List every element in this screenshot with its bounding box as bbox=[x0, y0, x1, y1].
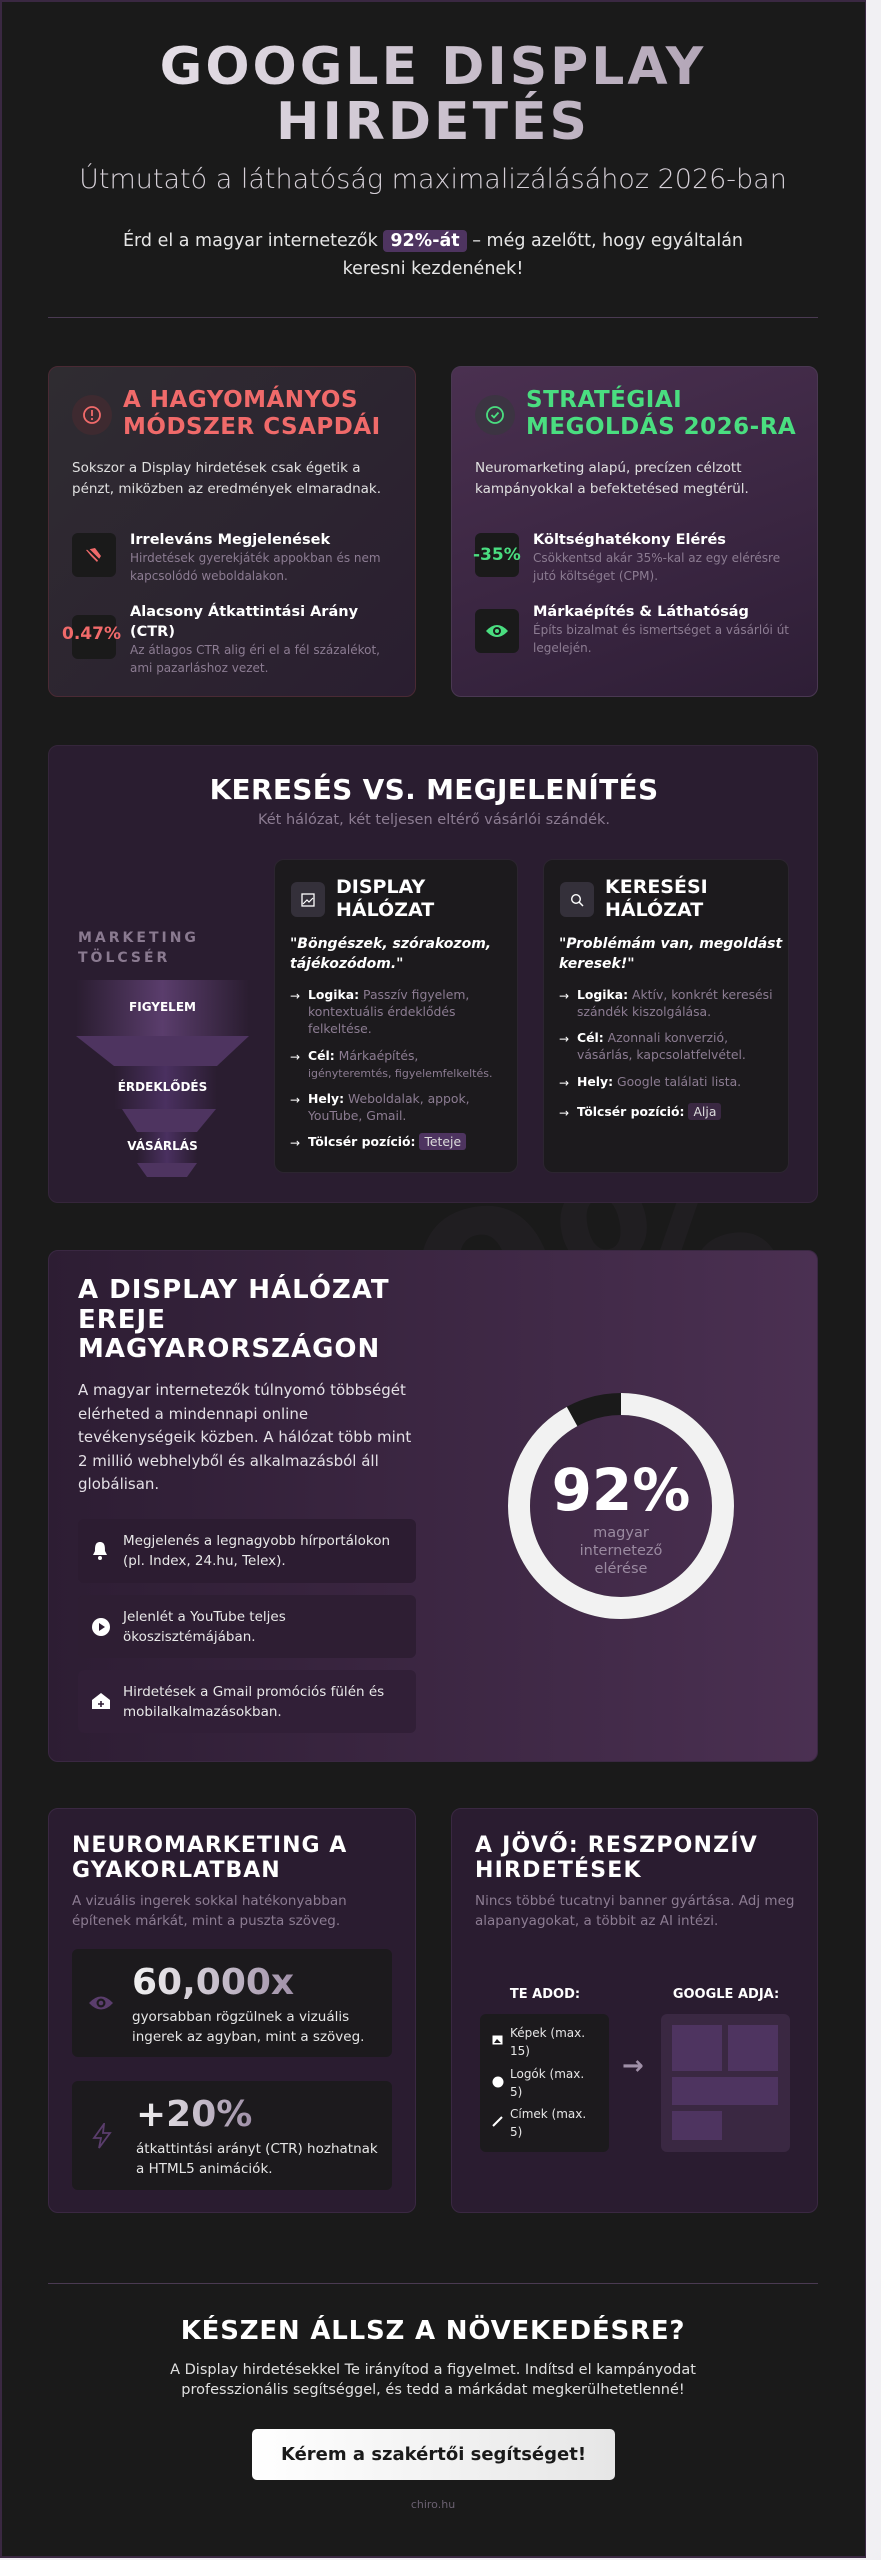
heading bbox=[475, 1831, 758, 1883]
CTA text bbox=[170, 2362, 696, 2398]
item: cost: Költséghatékony Elérés bbox=[533, 532, 726, 548]
heading: EREJE bbox=[78, 1304, 166, 1334]
heading: KERESÉS VS. MEGJELENÍTÉS bbox=[210, 773, 658, 806]
item: irrelevant: Irreleváns Megjelenések bbox=[130, 532, 330, 548]
stat: 60000x: 60,000x bbox=[132, 1962, 294, 2003]
funnel: ÉRDEKLŐDÉS bbox=[118, 1080, 207, 1094]
item: news: (pl. Index, 24.hu, Telex). bbox=[123, 1553, 286, 1569]
text bbox=[72, 460, 381, 497]
stat: +20%: +20% bbox=[136, 2094, 252, 2135]
panel: neuromarketing: A vizuális ingerek sokkal hatékonyabban bbox=[72, 1893, 347, 1909]
output grid: GOOGLE ADJA: bbox=[673, 1987, 779, 2002]
CTA button bbox=[252, 2429, 615, 2480]
tagline: Érd el a magyar internetezők 92%-át – még azelőtt, hogy egyáltalán bbox=[123, 231, 743, 251]
item: news: Megjelenés a legnagyobb hírportálokon bbox=[123, 1533, 390, 1549]
paragraph: A magyar internetezők túlnyomó többségét elérheted a mindennapi online tevékenységeik közben. A hálózat több mint 2 millió webhelyből és alkalmazásból áll globálisan. bbox=[78, 1381, 411, 1493]
stat: 60000x: gyorsabban rögzülnek a vizuális bbox=[132, 2009, 349, 2025]
heading: A DISPLAY HÁLÓZAT bbox=[78, 1275, 390, 1305]
heading: A HAGYOMÁNYOS bbox=[123, 387, 358, 413]
item: gmail bbox=[78, 1670, 416, 1733]
card: display network: Logika: Passzív figyelem, kontextuális érdeklődés felkeltése. bbox=[308, 987, 469, 1036]
input list: Címek (max. bbox=[510, 2107, 586, 2121]
card: search network: vásárlás, kapcsolatfelvétel. bbox=[577, 1047, 746, 1062]
item: youtube: ökoszisztémájában. bbox=[123, 1629, 256, 1645]
stat: 60000x bbox=[72, 1949, 392, 2057]
item: CTR: ami pazarláshoz vezet. bbox=[130, 661, 268, 675]
item: cost: Csökkentsd akár 35%-kal az egy elérésre bbox=[533, 551, 780, 565]
input list: Logók (max. bbox=[510, 2067, 584, 2081]
card: display network: "Böngészek, szórakozom, bbox=[290, 936, 491, 952]
CTA text: A Display hirdetésekkel Te irányítod a figyelmet. Indítsd el kampányodat bbox=[170, 2362, 696, 2378]
CTA button: Kérem a szakértői segítséget! bbox=[281, 2444, 586, 2465]
panel: responsive ads bbox=[451, 1808, 818, 2213]
tagline bbox=[123, 230, 743, 279]
donut chart 92%: elérése bbox=[595, 1561, 647, 1577]
footer: chiro.hu bbox=[411, 2498, 455, 2511]
panel: traditional pitfalls bbox=[48, 366, 416, 697]
heading bbox=[72, 1833, 347, 1883]
item: CTR: Az átlagos CTR alig éri el a fél százalékot, bbox=[130, 643, 380, 657]
card: search network: Logika: Aktív, konkrét keresési szándék kiszolgálása. bbox=[577, 987, 773, 1019]
card: display network: HÁLÓZAT bbox=[336, 899, 434, 921]
item: cost bbox=[473, 532, 780, 583]
item: brand bbox=[475, 604, 789, 655]
panel: display network power bbox=[48, 1250, 818, 1762]
subtitle: Két hálózat, két teljesen eltérő vásárlói szándék. bbox=[258, 812, 610, 828]
text bbox=[475, 460, 749, 497]
title: HIRDETÉS bbox=[276, 92, 590, 152]
input list: Képek (max. bbox=[510, 2026, 585, 2040]
card: search network: KERESÉSI bbox=[605, 876, 708, 898]
card: display network: DISPLAY bbox=[336, 876, 425, 898]
item: irrelevant: kapcsolódó weboldalakon. bbox=[130, 569, 288, 583]
funnel: MARKETING bbox=[78, 930, 199, 946]
heading: STRATÉGIAI bbox=[526, 387, 682, 413]
donut chart 92%: internetező bbox=[580, 1543, 662, 1559]
tagline: keresni kezdenének! bbox=[343, 259, 523, 279]
funnel bbox=[76, 930, 249, 1177]
CTA text: professzionális segítséggel, és tedd a márkádat megkerülhetetlenné! bbox=[181, 2382, 685, 2398]
panel: responsive ads: alapanyagokat, a többit az AI intézi. bbox=[475, 1913, 718, 1929]
icon: warning bbox=[72, 395, 112, 435]
text: Neuromarketing alapú, precízen célzott bbox=[475, 460, 742, 476]
card: display network: tájékozódom." bbox=[290, 956, 403, 972]
card: search network bbox=[543, 859, 789, 1173]
card: search network: Hely: Google találati lista. bbox=[577, 1074, 741, 1089]
card: search network: Cél: Azonnali konverzió, bbox=[577, 1030, 728, 1045]
heading bbox=[78, 1274, 390, 1364]
heading: MÓDSZER CSAPDÁI bbox=[123, 414, 381, 440]
heading: GYAKORLATBAN bbox=[72, 1858, 281, 1883]
item: CTR: Alacsony Átkattintási Arány bbox=[130, 604, 358, 620]
heading: MEGOLDÁS 2026-RA bbox=[526, 414, 796, 440]
item: gmail: mobilalkalmazásokban. bbox=[123, 1704, 282, 1720]
input list bbox=[480, 1987, 609, 2152]
item: cost: jutó költséget (CPM). bbox=[533, 569, 658, 583]
funnel: TÖLCSÉR bbox=[78, 950, 170, 966]
heading: A JÖVŐ: RESZPONZÍV bbox=[475, 1833, 758, 1858]
output grid bbox=[661, 1987, 790, 2152]
panel: responsive ads: Nincs többé tucatnyi banner gyártása. Adj meg bbox=[475, 1893, 794, 1909]
subtitle: Útmutató a láthatóság maximalizálásához 2026-ban bbox=[79, 164, 787, 195]
item: brand: legelején. bbox=[533, 641, 592, 655]
heading: MAGYARORSZÁGON bbox=[78, 1334, 380, 1364]
item: news bbox=[78, 1519, 416, 1583]
item: gmail: Hirdetések a Gmail promóciós fülén és bbox=[123, 1684, 384, 1700]
watermark: 0% bbox=[387, 1106, 806, 1434]
funnel: VÁSÁRLÁS bbox=[127, 1139, 198, 1153]
item: youtube: Jelenlét a YouTube teljes bbox=[123, 1609, 286, 1625]
donut chart 92%: magyar bbox=[593, 1525, 649, 1541]
heading: HIRDETÉSEK bbox=[475, 1858, 642, 1883]
icon: image bbox=[291, 882, 325, 917]
item: brand: Márkaépítés & Láthatóság bbox=[533, 604, 749, 620]
text: pénzt, miközben az eredmények elmaradnak. bbox=[72, 481, 381, 497]
stat: +20% bbox=[72, 2081, 392, 2190]
text: Sokszor a Display hirdetések csak égetik a bbox=[72, 460, 360, 476]
card: display network bbox=[274, 859, 518, 1173]
donut chart 92% bbox=[508, 1393, 734, 1619]
stat: +20%: a HTML5 animációk. bbox=[136, 2161, 273, 2177]
panel: search vs display bbox=[48, 745, 818, 1203]
card: search network: keresek!" bbox=[559, 956, 635, 972]
card: search network: "Problémám van, megoldást bbox=[559, 936, 782, 952]
input list: TE ADOD: bbox=[510, 1987, 580, 2002]
input list: 5) bbox=[510, 2125, 522, 2139]
donut chart 92%: 92% bbox=[552, 1456, 690, 1524]
item: CTR: 0.47% bbox=[62, 624, 121, 644]
arrow: → bbox=[622, 2051, 644, 2081]
item: CTR: (CTR) bbox=[130, 624, 175, 640]
card: display network: igényteremtés, figyelemfelkeltés. bbox=[308, 1067, 492, 1080]
card: search network: Tölcsér pozíció: Alja bbox=[577, 1104, 716, 1119]
icon: search bbox=[560, 882, 594, 917]
text: kampányokkal a befektetésed megtérül. bbox=[475, 481, 749, 497]
item: brand: Építs bizalmat és ismertséget a vásárlói út bbox=[533, 623, 789, 637]
icon: check bbox=[475, 395, 515, 435]
panel: neuromarketing: építenek márkát, mint a puszta szöveg. bbox=[72, 1913, 340, 1929]
card: display network: Hely: Weboldalak, appok, YouTube, Gmail. bbox=[308, 1091, 470, 1123]
card: display network: Cél: Márkaépítés, bbox=[308, 1048, 418, 1063]
item: CTR bbox=[62, 602, 380, 675]
item: youtube bbox=[78, 1595, 416, 1658]
panel: strategic solution bbox=[451, 366, 818, 697]
funnel: FIGYELEM bbox=[129, 1000, 196, 1014]
heading bbox=[123, 386, 381, 440]
item: irrelevant: Hirdetések gyerekjáték appokban és nem bbox=[130, 551, 381, 565]
heading: NEUROMARKETING A bbox=[72, 1833, 347, 1858]
input list: 15) bbox=[510, 2044, 530, 2058]
stat: +20%: átkattintási arányt (CTR) hozhatnak bbox=[136, 2141, 378, 2157]
card: search network: HÁLÓZAT bbox=[605, 899, 703, 921]
title: GOOGLE DISPLAY bbox=[160, 37, 706, 97]
item: irrelevant bbox=[72, 532, 381, 583]
panel: neuromarketing bbox=[48, 1808, 416, 2213]
CTA heading: KÉSZEN ÁLLSZ A NÖVEKEDÉSRE? bbox=[181, 2316, 685, 2346]
input list: 5) bbox=[510, 2085, 522, 2099]
item: cost: -35% bbox=[473, 545, 521, 565]
heading bbox=[526, 386, 796, 440]
title bbox=[0, 40, 866, 150]
card: display network: Tölcsér pozíció: Teteje bbox=[308, 1134, 461, 1149]
stat: 60000x: ingerek az agyban, mint a szöveg. bbox=[132, 2029, 364, 2045]
